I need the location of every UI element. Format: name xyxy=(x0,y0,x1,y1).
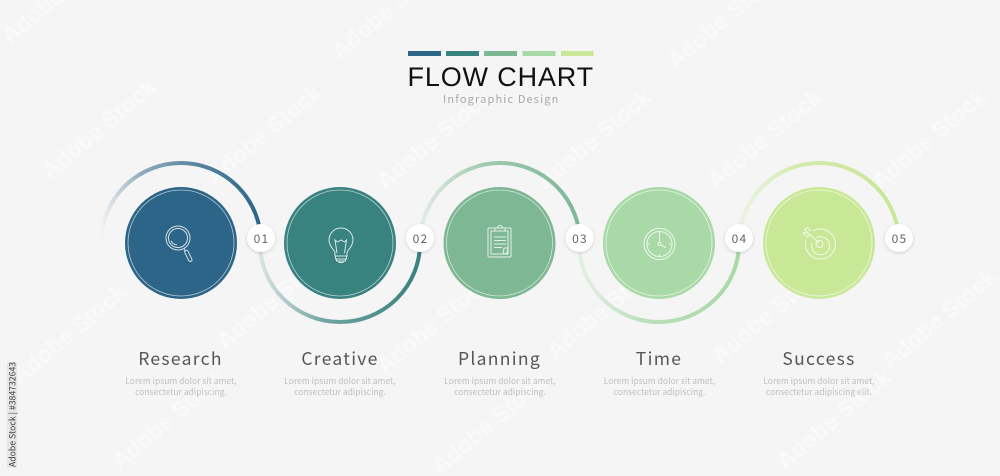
watermark pattern: Adobe Stock xyxy=(202,78,326,189)
watermark pattern: Adobe Stock xyxy=(37,73,161,184)
watermark pattern: Adobe Stock xyxy=(212,243,336,354)
watermark pattern: Adobe Stock xyxy=(542,253,666,364)
watermark pattern: Adobe Stock xyxy=(372,268,496,379)
text block: Creative: consectetur adipiscing. xyxy=(294,386,386,398)
watermark pattern: Adobe Stock xyxy=(702,83,826,194)
watermark pattern: Adobe Stock xyxy=(107,363,231,474)
watermark pattern: Adobe Stock xyxy=(772,363,896,474)
text block: Research: Research xyxy=(138,346,223,371)
number badge 04 xyxy=(725,224,753,252)
stock id side label: Adobe Stock | #384732643 xyxy=(6,362,18,467)
icon: magnifier xyxy=(166,226,192,261)
number badge 03 xyxy=(566,224,594,252)
text block: Creative: Lorem ipsum dolor sit amet, xyxy=(284,375,396,387)
number badge 02: 02 xyxy=(413,230,428,247)
number badge 01 xyxy=(247,224,275,252)
step 2 circle with light bulb icon xyxy=(284,187,396,299)
text block: Research: Lorem ipsum dolor sit amet, xyxy=(125,375,237,387)
text block: Success: Lorem ipsum dolor sit amet, xyxy=(763,375,875,387)
number badge 03: 03 xyxy=(572,230,588,247)
step 4 circle with clock icon xyxy=(603,187,715,299)
icon: light bulb xyxy=(329,228,353,262)
number badge 05: 05 xyxy=(892,230,907,247)
text block: Planning: Lorem ipsum dolor sit amet, xyxy=(444,375,556,387)
number badge 01: 01 xyxy=(254,230,269,247)
watermark pattern: Adobe Stock xyxy=(427,368,551,476)
step 1 circle with magnifier icon xyxy=(125,187,237,299)
icon: clock xyxy=(644,228,675,260)
text block: Success xyxy=(763,346,875,398)
text block: Planning: Planning xyxy=(458,346,541,371)
text block: Creative: Creative xyxy=(301,346,379,371)
text block: Success: consectetur adipiscing elit. xyxy=(766,386,872,398)
subtitle: Infographic Design xyxy=(443,91,559,107)
connector arcs xyxy=(101,163,899,322)
number badge 05 xyxy=(885,224,913,252)
step 5 circle with target icon xyxy=(763,187,875,299)
text block: Time: consectetur adipiscing. xyxy=(614,386,705,398)
text block: Planning xyxy=(444,346,556,398)
number badge 04: 04 xyxy=(732,230,747,247)
text block: Success: Success xyxy=(782,346,856,371)
step 3 circle with clipboard icon xyxy=(444,187,556,299)
icon: clipboard xyxy=(488,226,511,257)
text block: Research xyxy=(125,346,237,398)
text block: Time xyxy=(604,346,715,398)
text block: Research: consectetur adipiscing. xyxy=(135,386,227,398)
title: FLOW CHART xyxy=(408,62,594,92)
watermark pattern: Adobe Stock xyxy=(877,263,1000,374)
number badge 02 xyxy=(406,224,434,252)
text block: Creative xyxy=(284,346,396,398)
icon: target xyxy=(804,228,835,259)
watermark pattern: Adobe Stock xyxy=(532,83,656,194)
header colour bars xyxy=(408,51,594,56)
text block: Time: Lorem ipsum dolor sit amet, xyxy=(604,375,715,387)
text block: Time: Time xyxy=(636,346,682,371)
watermark pattern: Adobe Stock xyxy=(707,258,831,369)
text block: Planning: consectetur adipiscing. xyxy=(454,386,546,398)
watermark pattern: Adobe Stock xyxy=(867,83,991,194)
watermark pattern: Adobe Stock xyxy=(7,278,131,389)
watermark pattern: Adobe Stock xyxy=(372,83,496,194)
